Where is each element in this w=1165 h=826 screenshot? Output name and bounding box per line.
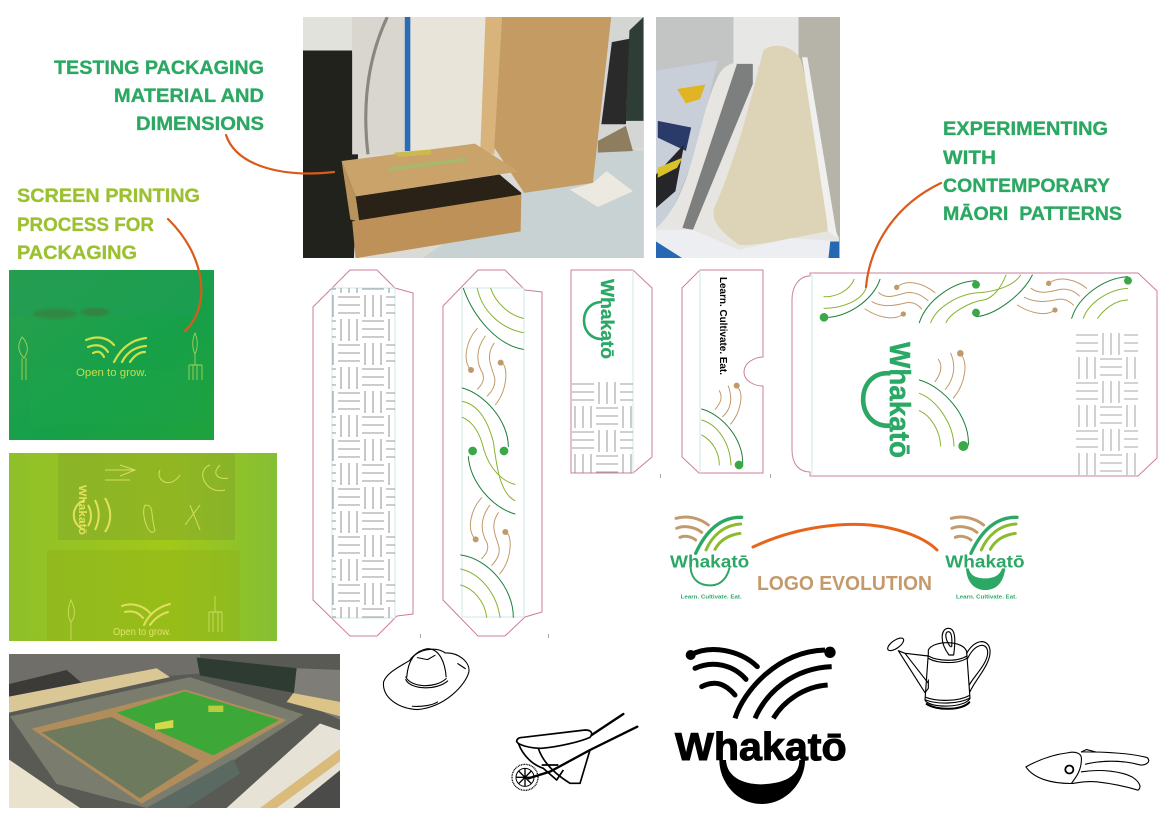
icon: watering can: [886, 628, 990, 709]
logo: refined version: [945, 517, 1025, 601]
photo: wool roll in tray: [656, 17, 840, 258]
heading: screen printing: [17, 186, 200, 264]
heading: experimenting with patterns: EXPERIMENTING: [943, 119, 1108, 140]
icon: hat: [383, 649, 469, 710]
dieline: tagline panel with notch: [682, 270, 763, 473]
arrow: logo evolution: [753, 524, 937, 550]
heading: experimenting with patterns: [943, 119, 1122, 225]
photo: green screen with Open to grow: [9, 270, 214, 440]
heading: experimenting with patterns: CONTEMPORARY: [943, 176, 1110, 197]
logo: black Whakatō mark: Whakatō: [675, 725, 847, 769]
logo: first version: Learn. Cultivate. Eat.: [681, 595, 742, 601]
dieline: curved koru panel: [443, 270, 542, 636]
photo: screen printing bed: [8, 653, 341, 808]
photo: lime screen with logo and tools: [9, 453, 277, 641]
dieline: patterned sleeve panel: [313, 270, 413, 636]
connector: patterns arrow: [866, 183, 941, 287]
photo: green screen with Open to grow: Open to grow.: [76, 367, 147, 379]
dieline: large box lid panel: [792, 273, 1157, 476]
logo: refined version: Whakatō: [945, 552, 1025, 572]
dieline: large box lid panel: Whakatō: [883, 342, 915, 458]
photo: lime screen with logo and tools: Whakatō: [76, 485, 88, 535]
heading: testing packaging: TESTING PACKAGING: [54, 58, 264, 79]
heading: experimenting with patterns: WITH: [943, 148, 996, 169]
heading: screen printing: PACKAGING: [17, 243, 137, 264]
icon: wheelbarrow: [512, 714, 637, 790]
heading: testing packaging: DIMENSIONS: [136, 114, 264, 135]
logo: black Whakatō mark: [675, 647, 847, 804]
dieline: logo end panel: Whakatō: [597, 279, 617, 359]
connector: packaging arrow: [226, 135, 334, 173]
logo: first version: Whakatō: [670, 552, 749, 572]
heading: testing packaging: [54, 58, 264, 135]
heading: screen printing: PROCESS FOR: [17, 215, 154, 236]
heading: experimenting with patterns: MĀORI PATTERNS: [943, 204, 1122, 225]
print marks: [420, 474, 771, 638]
heading: testing packaging: MATERIAL AND: [114, 86, 264, 107]
dieline: logo end panel: [571, 270, 652, 473]
heading: screen printing: SCREEN PRINTING: [17, 186, 200, 207]
label: logo evolution: LOGO EVOLUTION: [757, 573, 932, 595]
dieline: tagline panel with notch: Learn. Cultivate. Eat.: [717, 277, 729, 375]
connector: screen printing arrow: [168, 219, 201, 331]
logo: refined version: Learn. Cultivate. Eat.: [956, 595, 1017, 601]
photo: lime screen with logo and tools: Open to grow.: [113, 627, 171, 638]
photo: cardboard box prototype: [303, 17, 644, 258]
icon: secateurs: [1026, 750, 1149, 790]
logo: first version: [670, 517, 749, 601]
